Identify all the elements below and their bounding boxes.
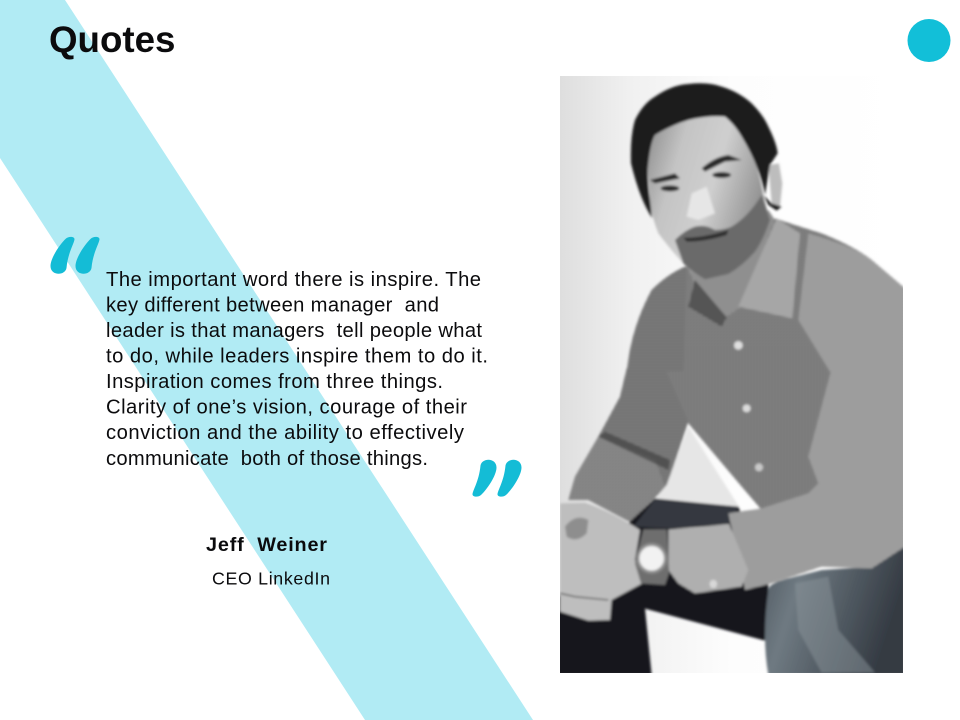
icon: opening quote mark (50, 237, 100, 274)
quote text: Inspiration comes from three things. (106, 371, 443, 393)
icon: accent circle (908, 19, 950, 62)
quote text: leader is that managers tell people what (106, 320, 482, 342)
quote text (106, 269, 488, 470)
portrait photo (555, 76, 905, 675)
attribution name: Jeff Weiner (206, 534, 327, 556)
quote text: The important word there is inspire. The (106, 269, 481, 291)
attribution role: CEO LinkedIn (212, 568, 330, 588)
quote text: to do, while leaders inspire them to do it. (106, 346, 488, 368)
title: Quotes (49, 19, 175, 60)
icon: closing quote mark (472, 460, 522, 497)
quote text: key different between manager and (106, 295, 439, 317)
quote text: communicate both of those things. (106, 448, 428, 470)
diagonal band (0, 0, 533, 720)
quote text: Clarity of one’s vision, courage of their (106, 397, 467, 419)
quote text: conviction and the ability to effectively (106, 422, 465, 444)
